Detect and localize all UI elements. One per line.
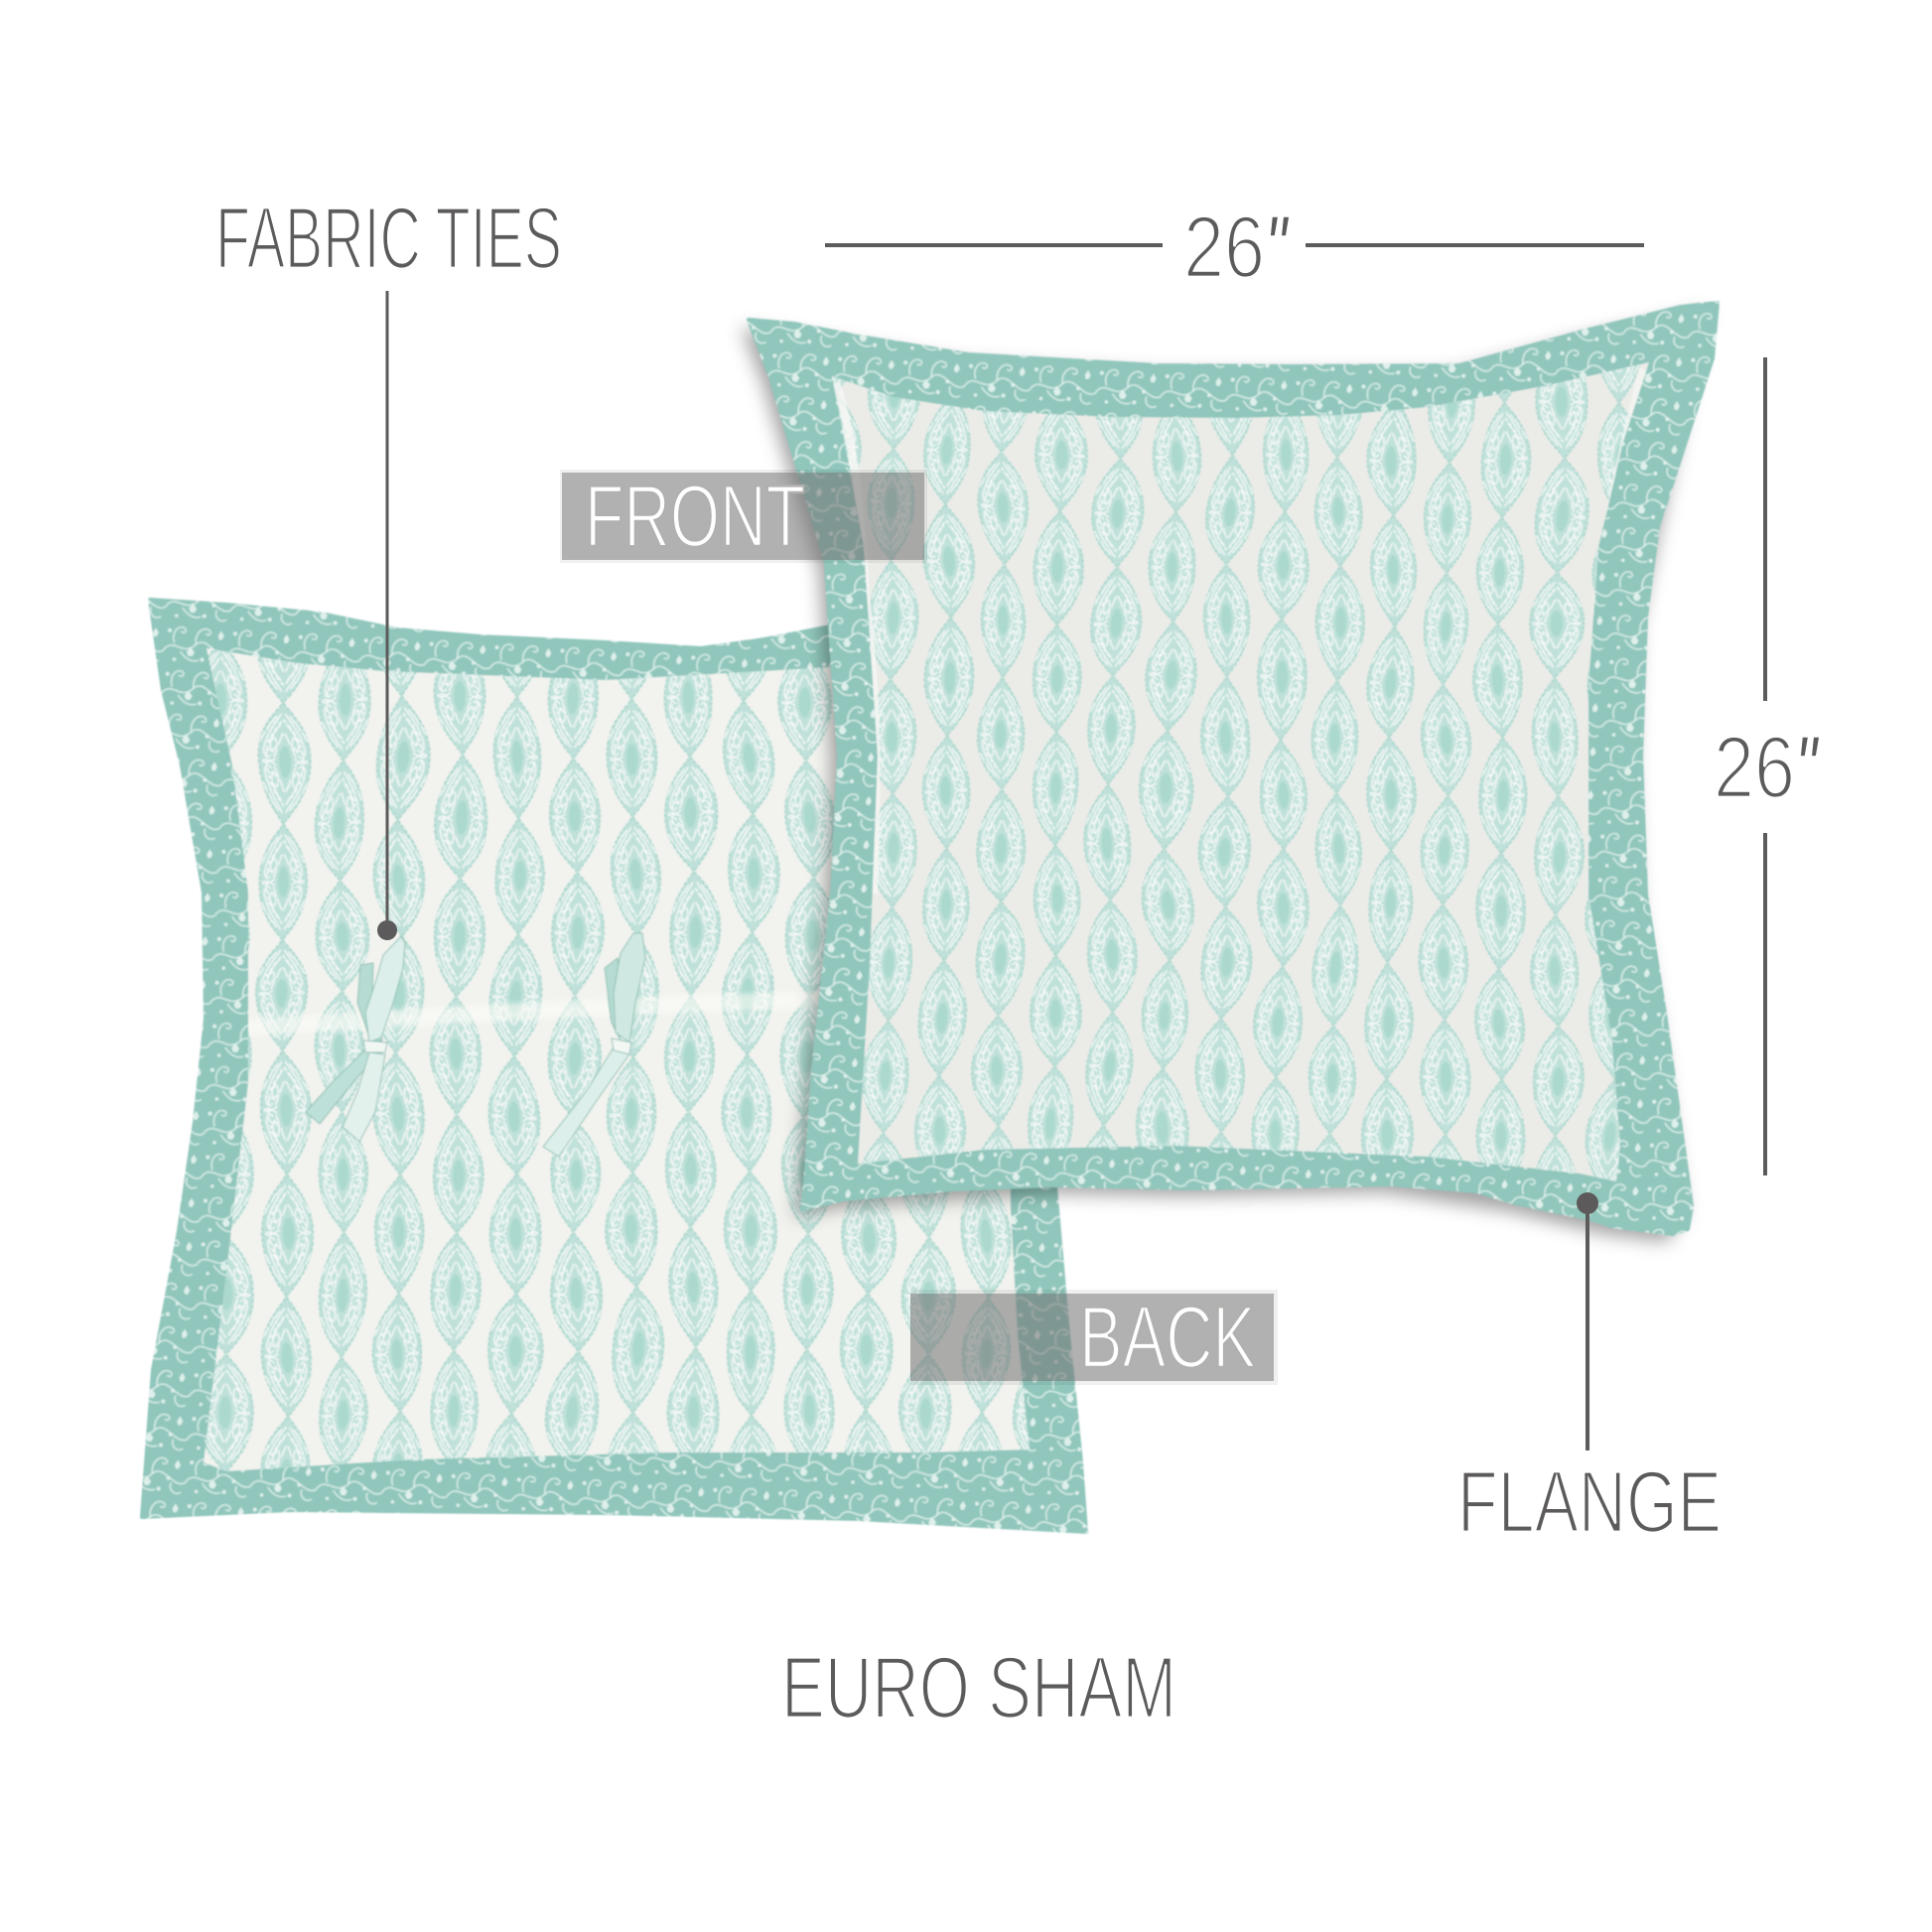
height line top [1763, 357, 1767, 701]
front pillow shadow [742, 311, 1706, 1242]
caption: EURO SHAM [781, 1638, 1176, 1736]
back pillow flange [142, 600, 1086, 1532]
fabric ties callout [215, 189, 562, 940]
height inch mark: " [1795, 718, 1820, 816]
back label text: BACK [1079, 1288, 1256, 1386]
width dimension [825, 198, 1644, 296]
panel: front pillow [749, 303, 1718, 1234]
height value: 26 [1714, 718, 1795, 816]
front label fill [562, 473, 924, 560]
fabric ties leader dot [377, 920, 397, 940]
front label text: FRONT [585, 467, 805, 565]
flange leader line [1586, 1203, 1589, 1450]
width line left [825, 243, 1163, 247]
flange leader dot [1577, 1192, 1598, 1214]
back pillow patterned panel [189, 635, 1042, 1479]
width value: 26 [1183, 198, 1265, 296]
fabric ties label: FABRIC TIES [215, 189, 562, 287]
panel: back pillow [142, 600, 1086, 1532]
height dimension [1714, 357, 1820, 1175]
width inch mark: " [1265, 198, 1290, 296]
height line bottom [1763, 833, 1767, 1175]
front label [560, 467, 927, 565]
back label [910, 1288, 1278, 1386]
flange callout [1457, 1192, 1722, 1551]
front pillow flange [749, 303, 1718, 1234]
fabric ties leader line [385, 291, 389, 930]
flange label: FLANGE [1457, 1452, 1722, 1551]
front label border [560, 470, 927, 563]
back pillow fabric ties [306, 933, 645, 1157]
width line right [1306, 243, 1644, 247]
front pillow patterned panel [824, 357, 1658, 1191]
back label border [910, 1290, 1278, 1385]
back label fill [910, 1294, 1274, 1381]
